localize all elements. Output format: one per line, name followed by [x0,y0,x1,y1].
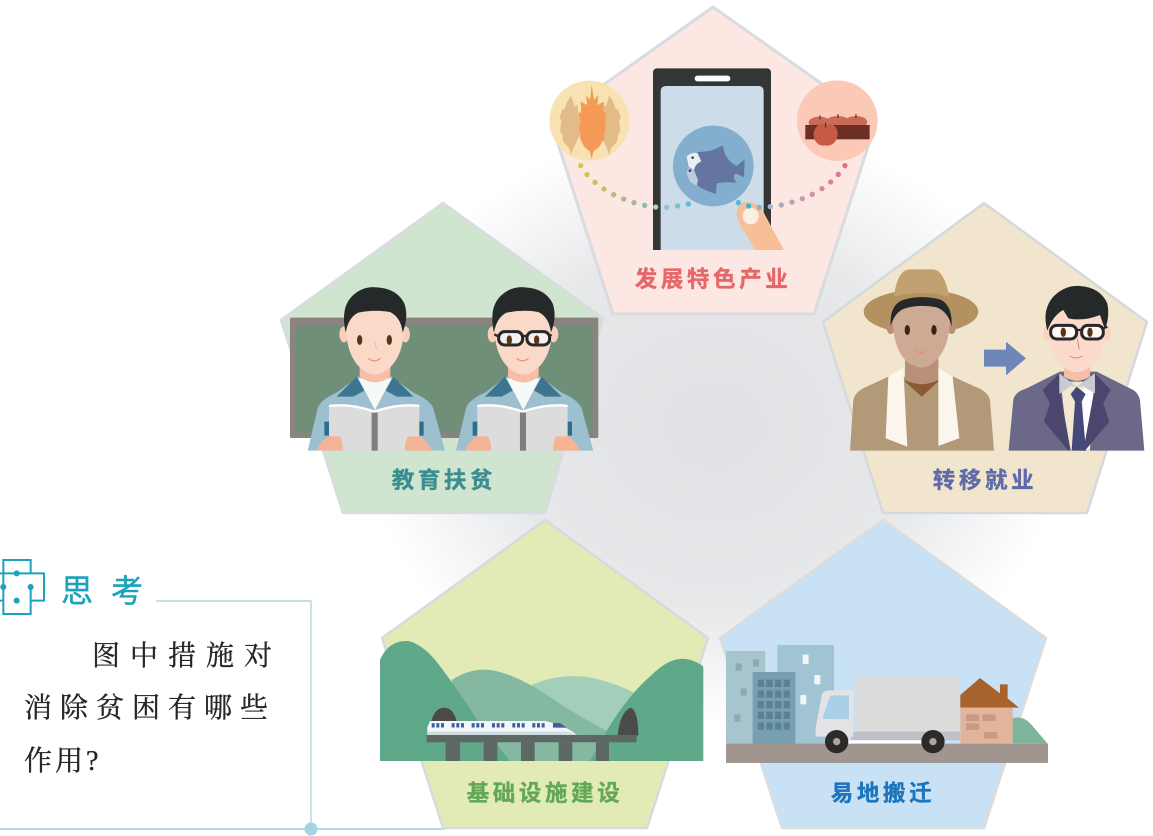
figure: office worker [1009,286,1144,451]
background glow [365,125,1065,725]
icon: finger [737,202,784,250]
icon: phone [653,68,784,250]
figure: farmer [850,269,994,451]
icon: linked squares [0,560,44,614]
label: 发展特色产业 [635,267,791,292]
blackboard [290,318,598,438]
icon: wheat [549,81,629,161]
dotted arc [578,163,848,210]
panel: employment [823,203,1147,513]
figure: student 2 [456,287,593,451]
text: question: 图中措施对 [92,640,282,672]
label: 转移就业 [933,468,1037,493]
illustration: buildings, truck, house [726,645,1048,763]
label: 教育扶贫 [392,467,496,493]
arrow [984,342,1026,375]
label: 易地搬迁 [831,781,935,806]
text: question: 消除贫困有哪些 [24,692,276,724]
text: question: 作用? [24,745,101,777]
panel: education [281,203,603,513]
panel: relocation [720,520,1048,828]
figure: student 1 [308,287,445,451]
label: 基础设施建设 [467,781,623,806]
icon: apples [797,80,878,161]
heading: think: 思 [61,573,93,609]
heading: think: 考 [111,573,143,609]
panel: think box [0,560,445,836]
heading: think [61,573,143,609]
illustration: mountains and train [380,641,703,761]
text: question [24,640,282,777]
panel: infrastructure [380,520,708,828]
panel: special industries [549,7,878,314]
